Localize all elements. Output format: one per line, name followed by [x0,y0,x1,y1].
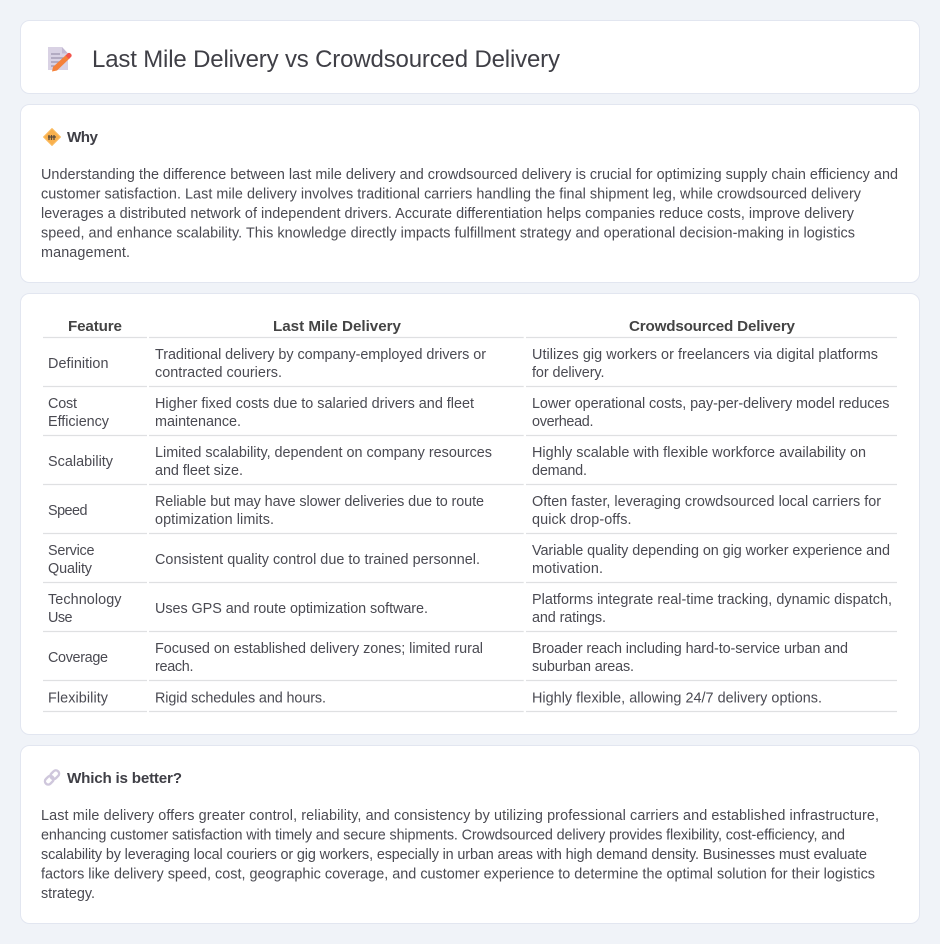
row: service quality: Quality [48,561,93,577]
row: scalability: Scalability [48,454,114,470]
text block: which is better paragraph: strategy. [41,886,95,902]
row: flexibility: Highly flexible, allowing 24/7 delivery options. [532,690,822,706]
row: flexibility [43,690,897,712]
row: speed [43,494,897,534]
text block: which is better paragraph: factors like delivery speed, cost, geographic coverage, and customer experience to determine the optimal solution for their logistics [41,866,875,882]
row: service quality: Consistent quality control due to trained personnel. [155,552,480,568]
text block: why paragraph: leverages a distributed network of independent drivers. Accurate differentiation helps companies reduce costs, improve delivery [41,206,855,222]
text block: which is better paragraph: scalability by leveraging local couriers or gig workers, especially in urban areas with high demand density. Businesses must evaluate [41,847,867,863]
icon: orange diamond sign [44,128,60,146]
table header row: Crowdsourced Delivery [629,318,796,335]
row: cost efficiency: Lower operational costs, pay-per-delivery model reduces [532,396,890,412]
row: definition: Definition [48,356,108,372]
row: coverage [43,641,897,680]
row: speed: Speed [48,503,88,519]
row: speed: Reliable but may have slower deliveries due to route [155,494,484,510]
text block: which is better paragraph [41,808,879,902]
row: speed: optimization limits. [155,512,274,528]
text block: why paragraph [41,167,898,261]
row: coverage: Coverage [48,650,108,666]
row: coverage: Focused on established delivery zones; limited rural [155,641,483,657]
text block: why paragraph: Understanding the difference between last mile delivery and crowdsourced delivery is crucial for optimizing supply chain efficiency and [41,167,898,183]
panel: which is better [20,746,920,924]
row: technology use: Technology [48,592,122,608]
row: scalability: Limited scalability, dependent on company resources [155,445,492,461]
row: scalability: Highly scalable with flexible workforce availability on [532,445,866,461]
row: coverage: Broader reach including hard-to-service urban and [532,641,848,657]
panel: title header [20,20,920,94]
row: coverage: suburban areas. [532,659,634,675]
row: flexibility: Flexibility [48,690,109,706]
table header row [43,318,897,338]
row: cost efficiency: Efficiency [48,414,110,430]
text block: which is better paragraph: enhancing customer satisfaction with timely and secure shipments. Crowdsourced delivery provides flexibility, cost-efficiency, and [41,828,845,844]
row: definition: Traditional delivery by company-employed drivers or [155,347,486,363]
row: cost efficiency [43,396,897,436]
row: definition: for delivery. [532,365,604,381]
title: Last Mile Delivery vs Crowdsourced Delivery [92,46,560,73]
row: coverage: reach. [155,659,194,675]
row: service quality: motivation. [532,561,603,577]
row: speed: Often faster, leveraging crowdsourced local carriers for [532,494,881,510]
row: scalability: demand. [532,463,587,479]
row: technology use: Uses GPS and route optimization software. [155,601,428,617]
table header row: Last Mile Delivery [273,318,402,335]
row: scalability: and fleet size. [155,463,243,479]
panel: why [20,104,920,282]
icon: memo with pencil [48,47,72,72]
table header row: Feature [68,318,122,335]
text block: why paragraph: speed, and enhance scalability. This knowledge directly impacts fulfillment strategy and operational decision-making in logistics [41,226,855,242]
row: cost efficiency: maintenance. [155,414,241,430]
row: service quality: Variable quality depending on gig worker experience and [532,543,890,559]
text block: why paragraph: management. [41,245,130,261]
row: service quality: Service [48,543,94,559]
icon: chain link [44,769,60,786]
row: scalability [43,445,897,484]
row: speed: quick drop-offs. [532,512,632,528]
row: technology use: Use [48,610,72,626]
row: service quality [43,543,897,582]
row: definition: contracted couriers. [155,365,282,381]
row: definition: Utilizes gig workers or freelancers via digital platforms [532,347,878,363]
row: definition [43,347,897,386]
row: cost efficiency: Higher fixed costs due to salaried drivers and fleet [155,396,474,412]
row: cost efficiency: overhead. [532,414,594,430]
text block: which is better paragraph: Last mile delivery offers greater control, reliability, and consistency by utilizing professional carriers and established infrastructure, [41,808,879,824]
heading: why: Why [67,129,99,146]
row: technology use: and ratings. [532,610,606,626]
row: technology use [43,592,897,632]
row: flexibility: Rigid schedules and hours. [155,690,326,706]
row: cost efficiency: Cost [48,396,77,412]
row: technology use: Platforms integrate real-time tracking, dynamic dispatch, [532,592,892,608]
panel: comparison table [20,294,920,734]
heading: which is better: Which is better? [67,770,182,787]
text block: why paragraph: customer satisfaction. Last mile delivery involves traditional carriers handling the final shipment leg, while crowdsourced delivery [41,186,862,202]
